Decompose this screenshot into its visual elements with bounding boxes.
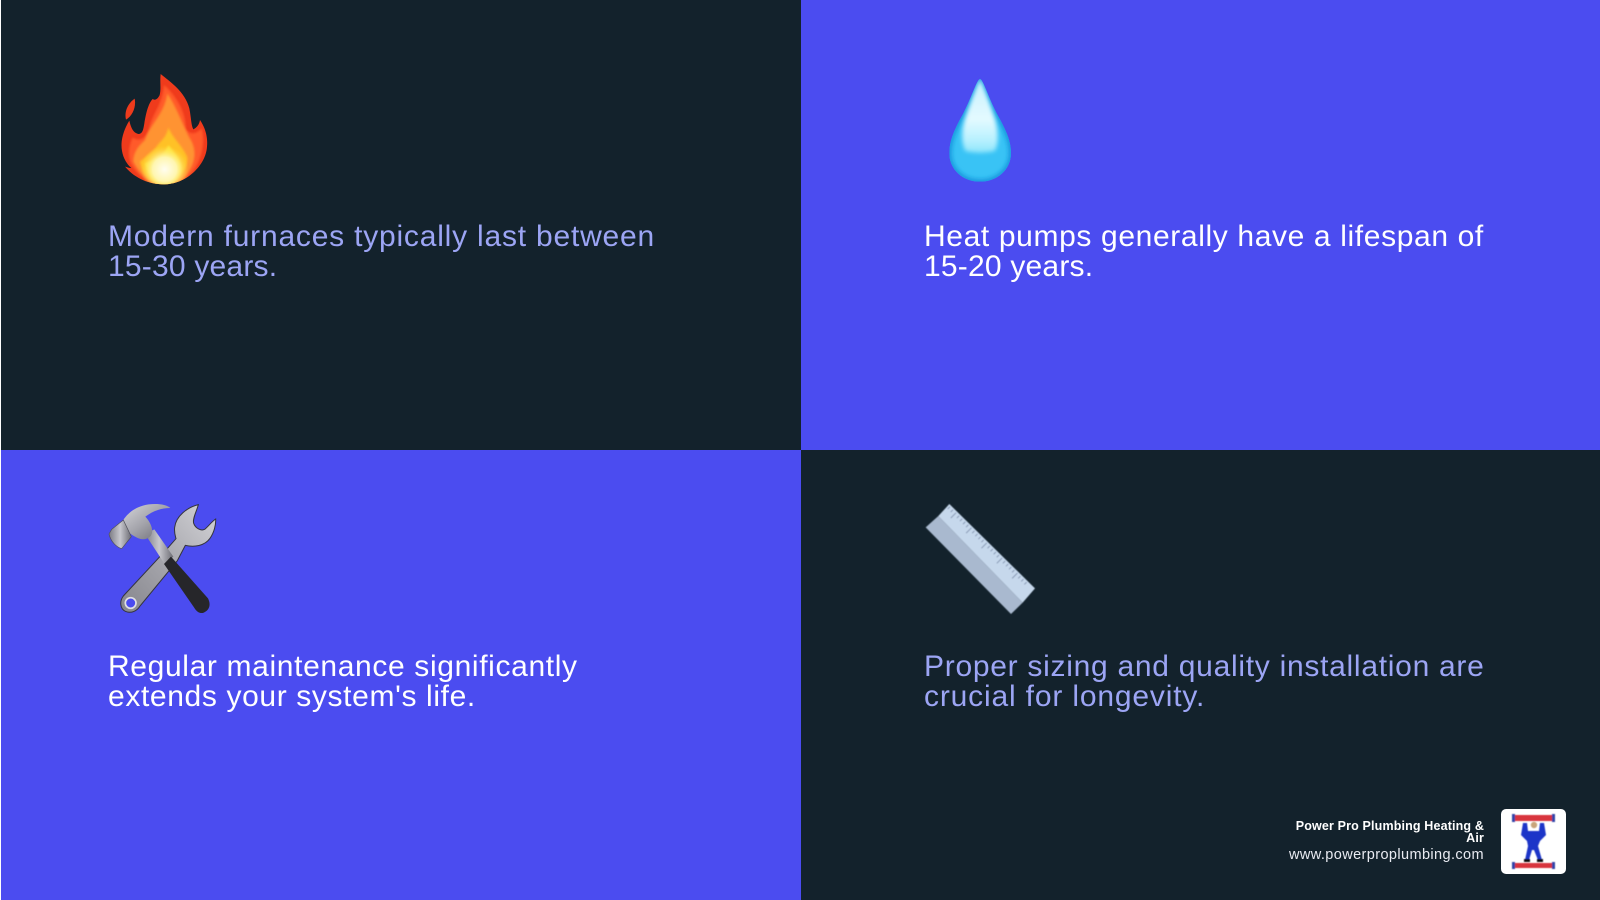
panel: maintenance [1, 450, 801, 900]
logo [1501, 809, 1566, 874]
company name: Air [1466, 831, 1484, 845]
text: maintenance: extends your system's life. [108, 680, 476, 713]
text: sizing and installation: Proper sizing and quality installation are [924, 650, 1485, 683]
company name: Power Pro Plumbing Heating & [1296, 819, 1484, 833]
icon: water drop [949, 79, 1011, 182]
website: www.powerproplumbing.com [1289, 847, 1484, 863]
panel: heat pumps [801, 0, 1600, 450]
footer: company name and website [1289, 819, 1484, 863]
text: heat pumps lifespan [924, 220, 1484, 283]
text: furnaces lifespan [108, 220, 655, 283]
text: sizing and installation [924, 650, 1485, 713]
text: furnaces lifespan: 15-30 years. [108, 250, 277, 283]
icon: hammer and wrench [108, 504, 216, 613]
text: maintenance [108, 650, 578, 713]
panel: sizing [801, 450, 1600, 900]
text: sizing and installation: crucial for longevity. [924, 680, 1205, 713]
text: heat pumps lifespan: Heat pumps generally have a lifespan of [924, 220, 1484, 253]
icon: ruler [925, 504, 1036, 614]
icon: fire [122, 74, 208, 184]
company name [1296, 819, 1484, 845]
panel: furnaces [1, 0, 801, 450]
text: maintenance: Regular maintenance significantly [108, 650, 578, 683]
text: heat pumps lifespan: 15-20 years. [924, 250, 1093, 283]
text: furnaces lifespan: Modern furnaces typically last between [108, 220, 655, 253]
